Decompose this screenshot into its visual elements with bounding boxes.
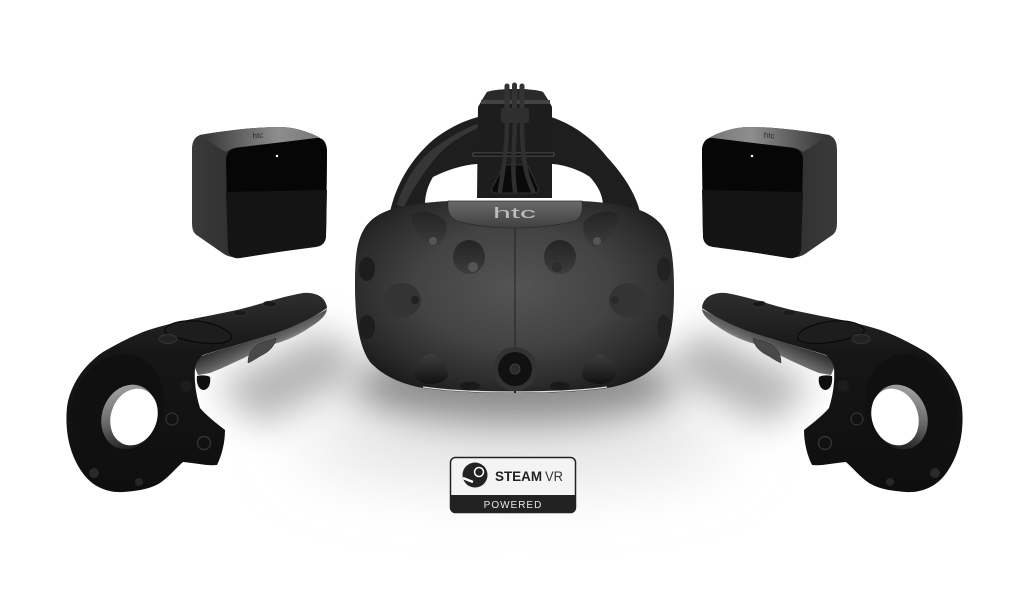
SteamVR badge [450, 458, 576, 513]
base station brand: right: htc [764, 131, 775, 140]
top strap [477, 89, 552, 198]
top visor plate [448, 201, 582, 228]
controller: right [702, 293, 972, 492]
front camera [493, 347, 537, 391]
head strap [390, 116, 640, 212]
base station: right [702, 127, 837, 258]
strap buckle line [473, 153, 554, 156]
sensor dents [359, 212, 671, 390]
base station: left [192, 127, 327, 258]
headset [355, 85, 674, 393]
centre seam [514, 228, 516, 393]
controller: left [57, 293, 327, 492]
Steam logo [462, 462, 488, 488]
cable bundle [500, 122, 533, 191]
visor body [355, 201, 674, 393]
Steam wordmark: STEAM [495, 468, 542, 484]
cable opening [492, 165, 538, 193]
Powered label: POWERED [484, 500, 542, 511]
soft floor shadows [215, 330, 814, 482]
cable clip [501, 108, 529, 123]
VR wordmark: VR [545, 468, 563, 484]
top cables [507, 85, 522, 110]
bottom highlight [423, 387, 607, 392]
base station brand: left: htc [252, 131, 263, 140]
htc logo: htc [493, 205, 537, 222]
